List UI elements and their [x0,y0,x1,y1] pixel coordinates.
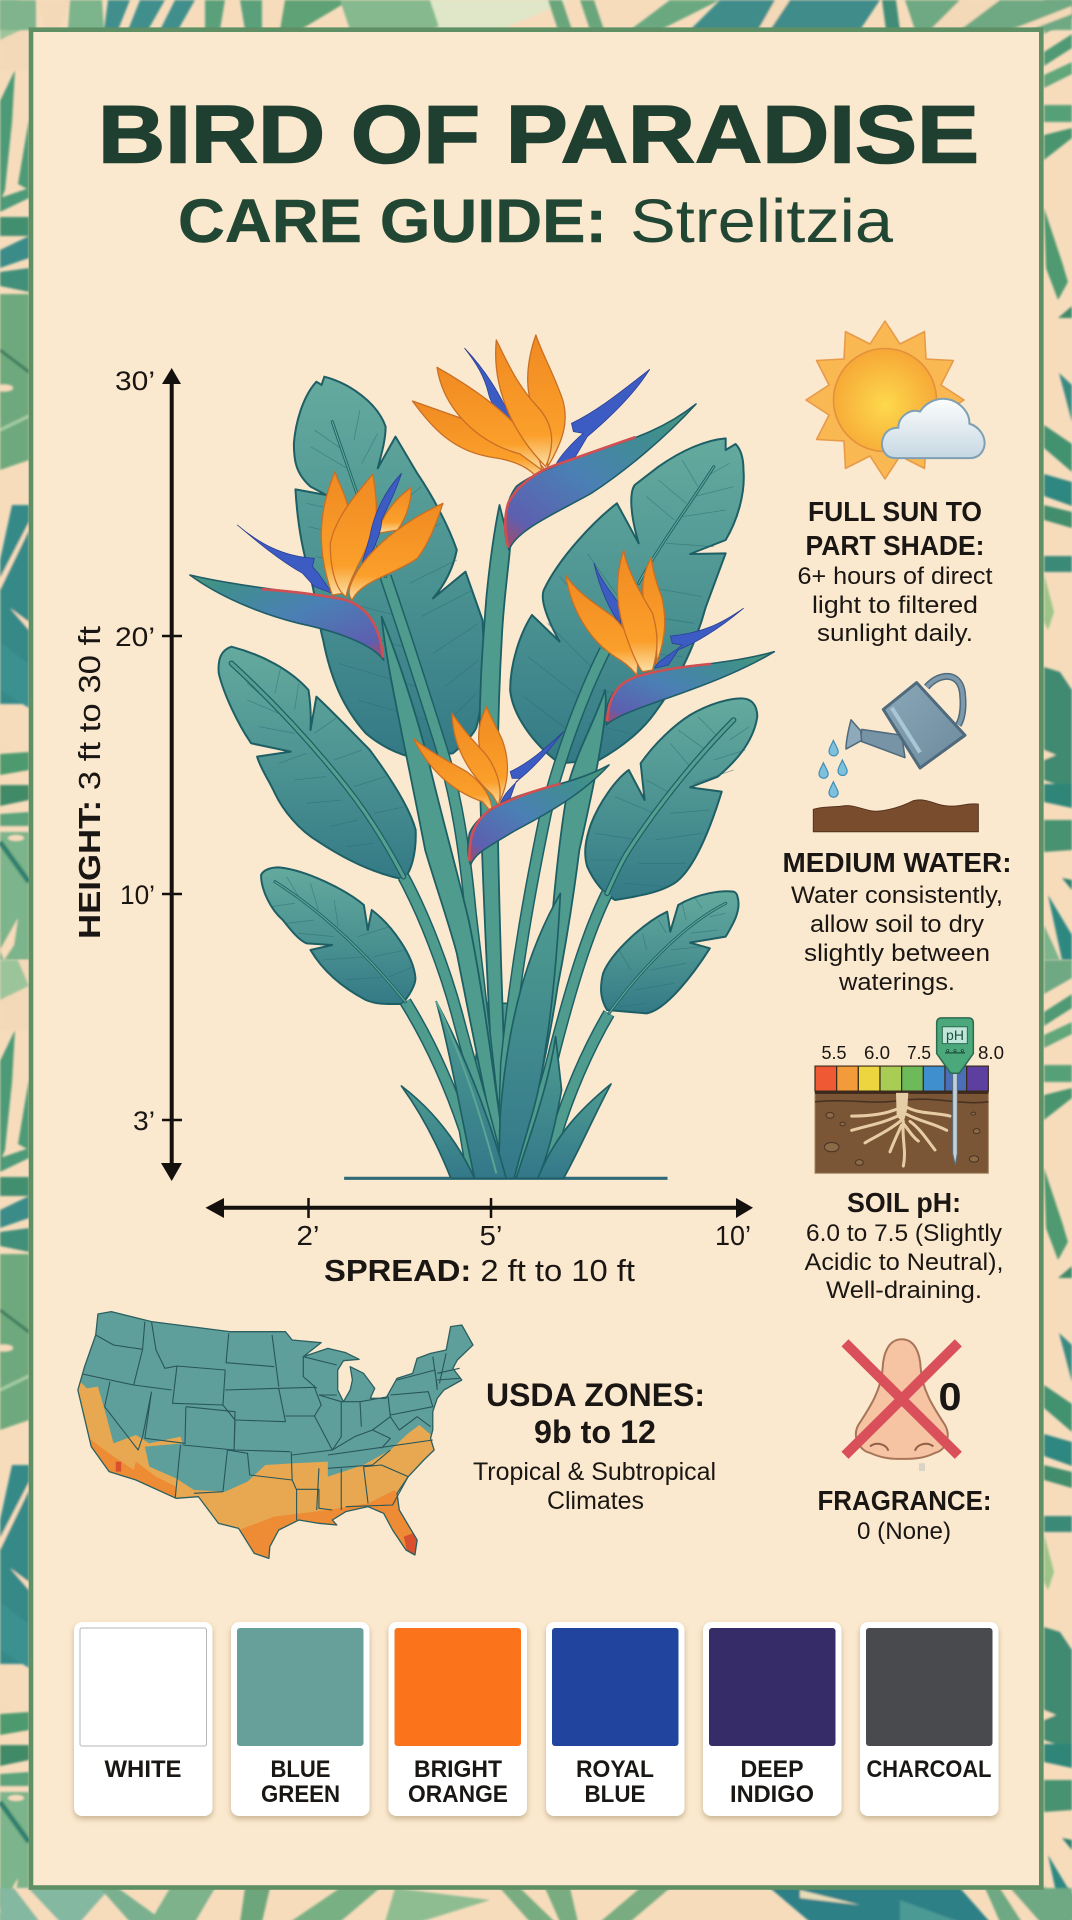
chart: height axis: 3’ [133,1106,155,1136]
text: sun: 6+ hours of direct [798,563,993,590]
text: fragrance: FRAGRANCE: [818,1485,992,1516]
text: water: MEDIUM WATER: [782,847,1012,878]
text: sun: sunlight daily. [817,620,973,647]
map: USDA zones [73,1312,473,1563]
text: USDA zones: Climates [547,1487,644,1515]
subtitle [178,187,893,255]
text: USDA zones: USDA ZONES: [486,1377,705,1413]
spear: left [382,617,508,1177]
base mass [471,1003,538,1178]
leaf: right lower [585,698,757,900]
text: pH scale numbers: 8.0 [978,1043,1004,1063]
foliage: top border strip [0,0,1072,30]
text: soil: 6.0 to 7.5 (Slightly [806,1220,1002,1247]
height label: HEIGHT: 3 ft to 30 ft [72,626,107,939]
stem: back left leaf [332,422,500,1177]
swatch: blue green [231,1622,370,1819]
chart: height axis: 30’ [115,366,155,396]
foliage: left border strip repeat [0,960,29,1920]
flower: top [413,335,696,550]
veins: lower leaves [247,667,749,1007]
text: pH scale numbers: 6.0 [864,1043,890,1063]
base blades [401,893,611,1178]
swatch: royal blue: BLUE [584,1781,646,1808]
veins: back leaves [307,410,734,733]
flower: right [566,550,774,725]
text: pH scale numbers: 7.5 [907,1043,931,1063]
spear: right [504,690,606,1177]
icon: crossed-out nose [845,1339,958,1471]
text: water [782,847,1012,996]
text: USDA zones: 9b to 12 [534,1414,656,1450]
stem: small left leaf [275,882,473,1177]
text: fragrance zero: 0 [938,1376,962,1419]
swatch: royal blue: ROYAL [576,1756,654,1783]
flower: lower centre [413,707,609,865]
stem: central [480,505,510,1177]
swatch: deep indigo [703,1622,842,1819]
chart: height axis: 10’ [120,880,155,910]
spread label: SPREAD: 2 ft to 10 ft [324,1253,635,1288]
chart: height axis [115,366,182,1181]
text: water: slightly between [804,940,990,967]
text: water: Water consistently, [791,882,1003,909]
text: soil: Acidic to Neutral), [804,1249,1004,1276]
text: fragrance: 0 (None) [857,1518,951,1545]
swatch: bright orange: ORANGE [408,1781,508,1808]
swatch: charcoal [860,1622,998,1819]
swatch: white [74,1622,212,1819]
text: soil: SOIL pH: [847,1187,961,1218]
chart: spread axis: 2’ [296,1220,320,1251]
chart: spread axis [206,1198,753,1251]
stem: small right leaf [546,903,726,1177]
stem: left lower leaf [231,663,500,1177]
swatch: white: WHITE [104,1756,182,1783]
subtitle: CARE GUIDE: [178,187,607,255]
swatch: deep indigo: INDIGO [730,1781,814,1808]
swatch: blue green: BLUE [270,1756,330,1783]
icon: watering can [813,676,978,832]
text: pH scale numbers [822,1027,1004,1063]
text: sun: FULL SUN TO [808,496,982,527]
text: sun: PART SHADE: [806,530,984,561]
palette: colour swatches [74,1622,998,1819]
text: USDA zones: Tropical & Subtropical [473,1458,716,1486]
swatch: deep indigo: DEEP [740,1756,804,1783]
foliage: bottom border strip [0,1888,1072,1920]
text: soil: Well-draining. [826,1277,982,1304]
foliage: right border strip repeat [1044,960,1072,1920]
swatch: bright orange [388,1622,527,1819]
text: water: waterings. [838,969,955,996]
chart: spread axis: 5’ [480,1220,502,1251]
chart: spread axis: 10’ [715,1220,751,1251]
stem: right lower leaf [516,720,734,1177]
foliage: right border strip [1044,0,1072,960]
title: BIRD OF PARADISE [98,90,979,180]
leaf: back right [510,438,744,763]
text: USDA zones [473,1377,716,1515]
illustration: bird of paradise plant [190,335,774,1178]
leaf: left lower [219,647,416,879]
text: sun [798,496,993,647]
subtitle: Strelitzia [630,187,893,255]
text: pH scale numbers: pH [946,1027,964,1043]
swatch: blue green: GREEN [261,1781,340,1808]
swatch: royal blue [546,1622,684,1819]
icon: sun with cloud [806,321,985,479]
icon: soil pH meter [815,1018,988,1173]
text: soil [804,1187,1004,1304]
chart: height axis: 20’ [115,622,155,652]
text: sun: light to filtered [812,592,978,619]
text: pH scale numbers: 5.5 [822,1043,846,1063]
text: fragrance [818,1485,992,1545]
ground line [344,1177,668,1180]
leaf: small right [601,891,739,1013]
foliage: left border strip [0,0,29,960]
swatch: charcoal: CHARCOAL [866,1756,992,1783]
text: water: allow soil to dry [810,911,984,938]
leaf: back left [294,377,484,757]
flower: left [190,472,443,660]
stem: back right leaf [502,467,714,1177]
leaf: small left [261,867,415,1004]
swatch: bright orange: BRIGHT [414,1756,502,1783]
